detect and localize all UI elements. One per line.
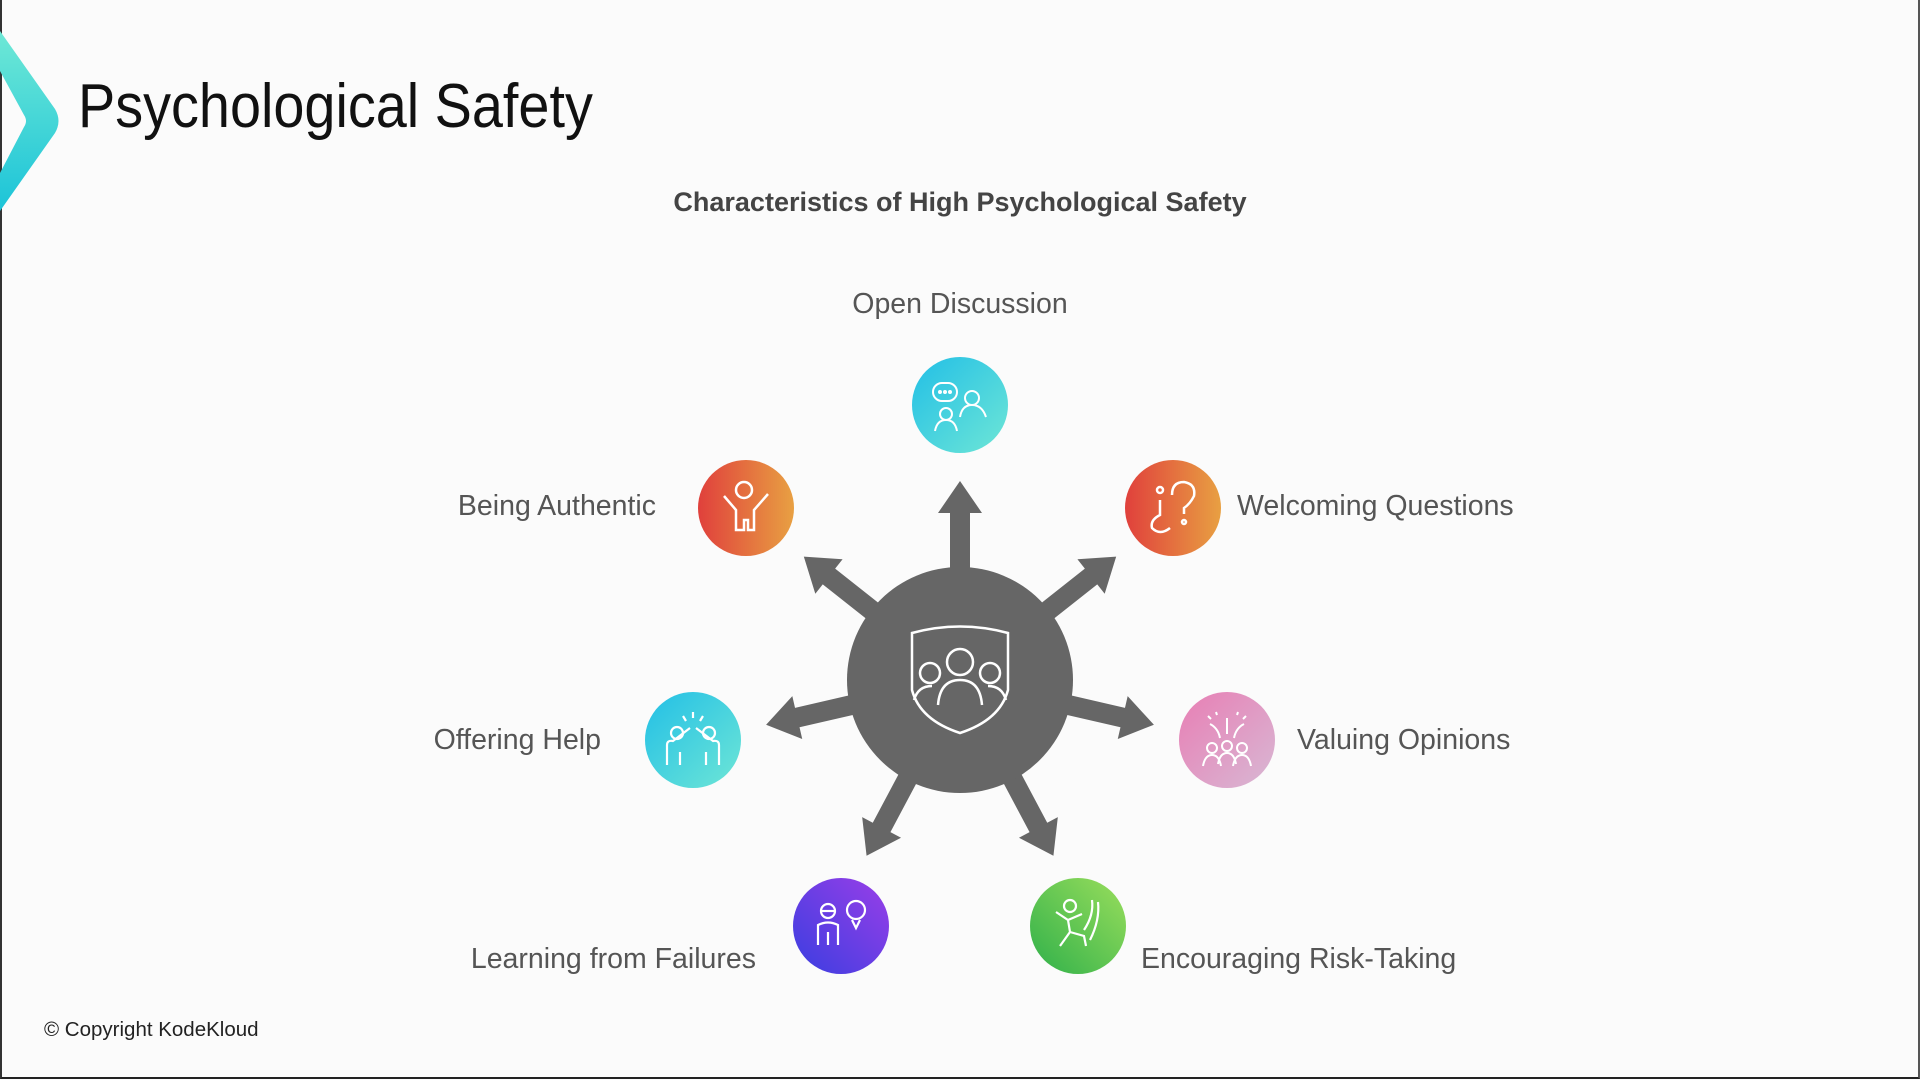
central hub circle [847, 567, 1073, 793]
label: welcoming questions: Welcoming Questions [1237, 490, 1514, 522]
subtitle: Characteristics of High Psychological Safety [673, 187, 1247, 217]
copyright: © Copyright KodeKloud [44, 1018, 259, 1041]
label: being authentic: Being Authentic [458, 490, 656, 522]
label: learning from failures: Learning from Failures [471, 943, 756, 975]
icon: welcoming questions [1125, 460, 1221, 556]
arrows [761, 481, 1159, 866]
label: encouraging risk-taking: Encouraging Risk-Taking [1141, 943, 1456, 975]
icon: open discussion [912, 357, 1008, 453]
title: Psychological Safety [78, 72, 593, 141]
icon: learning from failures [793, 878, 889, 974]
icon: being authentic [698, 460, 794, 556]
icon: encouraging risk-taking [1030, 878, 1126, 974]
icon: valuing opinions [1179, 692, 1275, 788]
label: offering help: Offering Help [434, 724, 601, 756]
icon: offering help [645, 692, 741, 788]
logo chevron [0, 31, 58, 211]
label: valuing opinions: Valuing Opinions [1297, 724, 1510, 756]
label: open discussion: Open Discussion [852, 288, 1068, 320]
